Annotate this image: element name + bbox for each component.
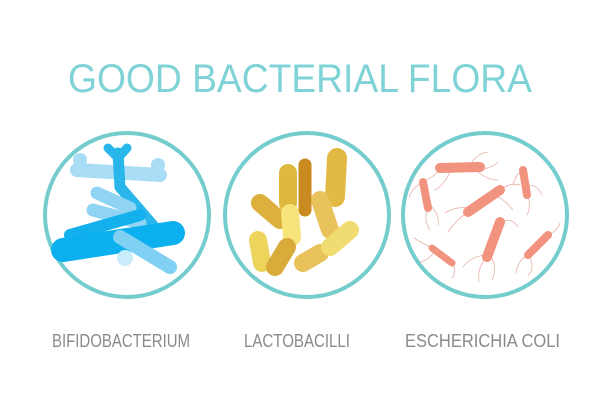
label: bifidobacterium: BIFIDOBACTERIUM (52, 331, 190, 351)
title: GOOD BACTERIAL FLORA (68, 57, 532, 101)
panel: escherichia coli (403, 133, 567, 297)
panel: lactobacilli (225, 133, 389, 297)
panel: bifidobacterium (45, 133, 209, 297)
label: escherichia coli: ESCHERICHIA COLI (405, 331, 560, 351)
label: lactobacilli: LACTOBACILLI (244, 331, 350, 351)
